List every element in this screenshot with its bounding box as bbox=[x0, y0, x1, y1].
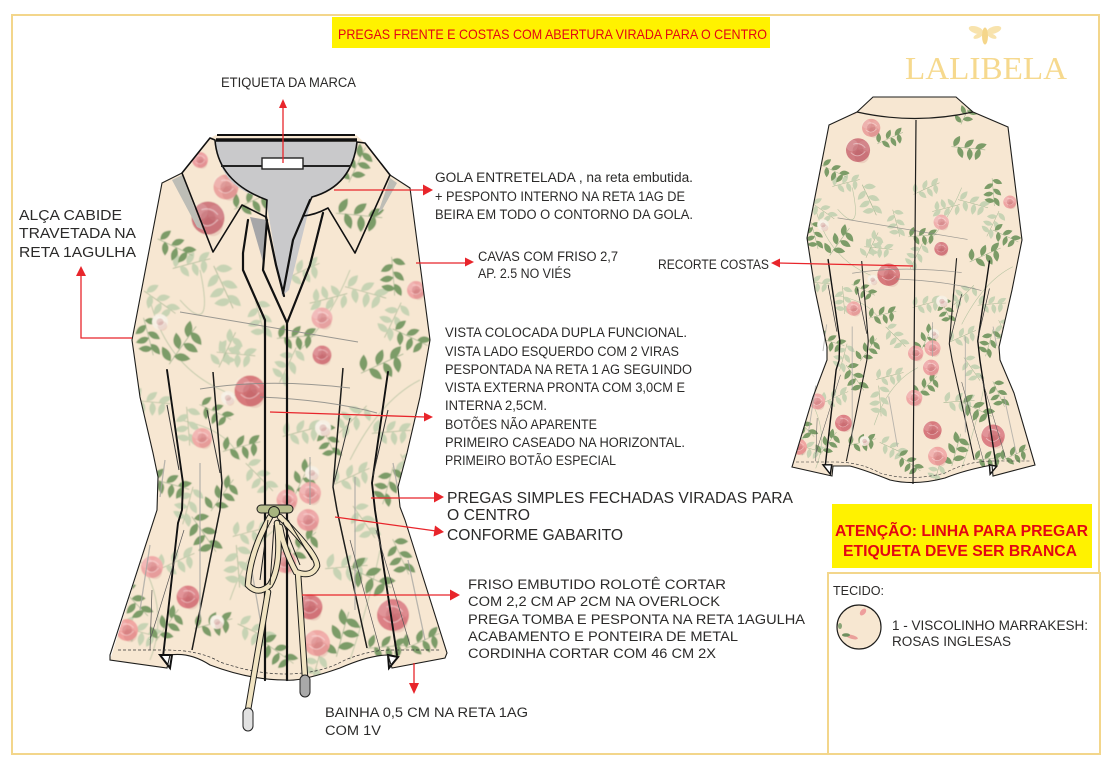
label: brand label: ETIQUETA DA MARCA bbox=[221, 75, 356, 90]
text: collar: + PESPONTO INTERNO NA RETA 1AG DE bbox=[435, 189, 685, 204]
garment outline bbox=[792, 97, 1035, 483]
text: collar: GOLA ENTRETELADA , na reta embutida. bbox=[435, 170, 693, 185]
text: facing: BOTÕES NÃO APARENTE bbox=[445, 417, 597, 432]
icon: fabric swatch bbox=[837, 605, 881, 649]
panel: fabric bbox=[828, 573, 1100, 754]
neck band bbox=[217, 134, 355, 136]
text: drawstring: CORDINHA CORTAR COM 46 CM 2X bbox=[468, 646, 716, 661]
logo: Lalibela: LALIBELA bbox=[905, 50, 1067, 86]
text: drawstring: PREGA TOMBA E PESPONTA NA RETA 1AGULHA bbox=[468, 612, 805, 627]
logo: Lalibela bbox=[905, 24, 1067, 86]
pleats and darts bbox=[808, 218, 1016, 474]
text: facing bbox=[445, 325, 692, 468]
arrow: back seam bbox=[771, 258, 913, 268]
text: collar bbox=[435, 170, 693, 222]
collar seam and center seam bbox=[857, 112, 973, 484]
label: fabric heading: TECIDO: bbox=[833, 583, 884, 598]
label: back seam: RECORTE COSTAS bbox=[658, 257, 769, 272]
arrow: brand label bbox=[279, 99, 287, 163]
text: hanger loop: RETA 1AGULHA bbox=[19, 244, 136, 261]
text: fabric name: ROSAS INGLESAS bbox=[892, 634, 1011, 649]
shoulder shading bbox=[172, 175, 397, 230]
text: facing: VISTA EXTERNA PRONTA COM 3,0CM E bbox=[445, 380, 685, 395]
text: hem: BAINHA 0,5 CM NA RETA 1AG bbox=[325, 705, 528, 720]
back garment bbox=[791, 96, 1036, 484]
callout: thread warning: ATENÇÃO: LINHA PARA PREGAR bbox=[835, 522, 1088, 540]
arrow: facing bbox=[270, 412, 433, 422]
text: drawstring: COM 2,2 CM AP 2CM NA OVERLOCK bbox=[468, 594, 720, 609]
text: facing: PRIMEIRO BOTÃO ESPECIAL bbox=[445, 453, 616, 468]
title banner bbox=[332, 17, 770, 48]
text: armhole: CAVAS COM FRISO 2,7 bbox=[478, 249, 618, 264]
text: hem bbox=[325, 705, 528, 738]
callout: thread warning: ETIQUETA DEVE SER BRANCA bbox=[843, 543, 1077, 560]
arrow: collar bbox=[334, 184, 433, 196]
text: hem: COM 1V bbox=[325, 723, 381, 738]
fabric body bbox=[110, 135, 446, 680]
collar bbox=[182, 138, 390, 253]
text: facing: VISTA LADO ESQUERDO COM 2 VIRAS bbox=[445, 344, 679, 359]
text: armhole bbox=[478, 249, 618, 281]
arrow: hanger loop bbox=[76, 266, 132, 338]
text: drawstring: FRISO EMBUTIDO ROLOTÊ CORTAR bbox=[468, 577, 726, 592]
text: fabric name: 1 - VISCOLINHO MARRAKESH: bbox=[892, 618, 1088, 633]
text: facing: PRIMEIRO CASEADO NA HORIZONTAL. bbox=[445, 435, 685, 450]
text: hanger loop: TRAVETADA NA bbox=[19, 225, 136, 242]
hem stitching bbox=[796, 461, 1030, 478]
text: pleats bbox=[447, 490, 794, 544]
text: facing: VISTA COLOCADA DUPLA FUNCIONAL. bbox=[445, 325, 687, 340]
arrow: pleats lower bbox=[335, 517, 444, 536]
text: pleats: CONFORME GABARITO bbox=[447, 527, 623, 544]
text: drawstring bbox=[468, 577, 805, 661]
text: facing: INTERNA 2,5CM. bbox=[445, 398, 547, 413]
placket lines bbox=[243, 200, 323, 680]
callout: thread warning bbox=[832, 504, 1092, 568]
text: hanger loop: ALÇA CABIDE bbox=[19, 207, 122, 224]
text: fabric name bbox=[892, 618, 1088, 649]
icon: bee bbox=[968, 24, 1002, 44]
arrow: armhole bbox=[416, 258, 474, 266]
neck interior bbox=[215, 140, 357, 296]
fabric body bbox=[792, 98, 1034, 482]
arrow: pleats upper bbox=[371, 492, 444, 502]
text: hanger loop bbox=[19, 207, 136, 261]
garment outline bbox=[110, 173, 447, 680]
front garment bbox=[109, 134, 448, 732]
hem stitching bbox=[118, 650, 440, 674]
drawstring bbox=[243, 505, 317, 731]
text: armhole: AP. 2.5 NO VIÉS bbox=[478, 266, 571, 281]
text: collar: BEIRA EM TODO O CONTORNO DA GOLA. bbox=[435, 207, 693, 222]
pleats and darts bbox=[140, 312, 425, 668]
arrow: hem bbox=[409, 663, 419, 694]
arrow: drawstring bbox=[302, 590, 460, 600]
title banner: PREGAS FRENTE E COSTAS COM ABERTURA VIRADA PARA O CENTRO bbox=[338, 26, 767, 42]
text: pleats: PREGAS SIMPLES FECHADAS VIRADAS PARA bbox=[447, 490, 794, 507]
icon: brand label bbox=[262, 158, 303, 169]
text: pleats: O CENTRO bbox=[447, 507, 530, 524]
text: facing: PESPONTADA NA RETA 1 AG SEGUINDO bbox=[445, 362, 692, 377]
text: drawstring: ACABAMENTO E PONTEIRA DE METAL bbox=[468, 629, 739, 644]
